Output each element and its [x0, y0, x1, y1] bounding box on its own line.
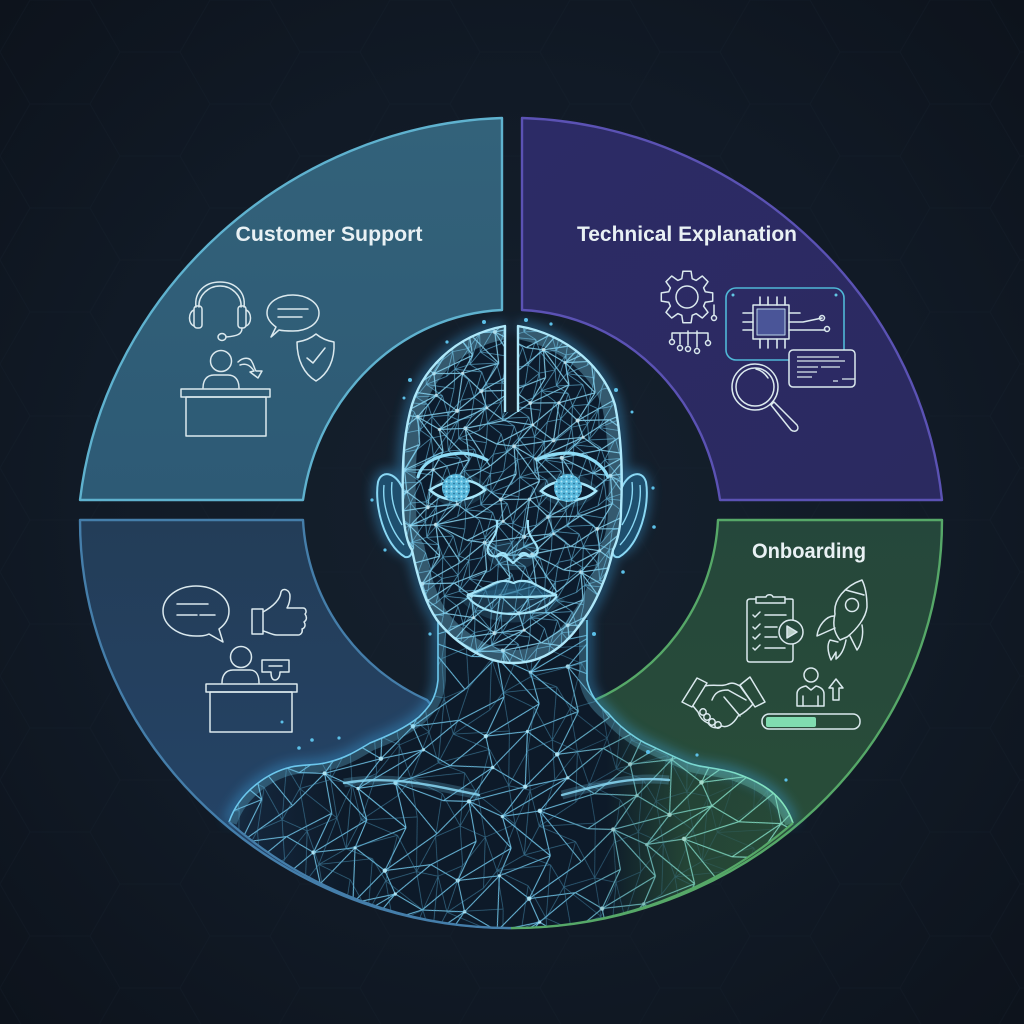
icon: magnifying glass: [732, 364, 798, 431]
icon: thumbs up: [252, 589, 306, 635]
progress bar: [762, 714, 860, 729]
icon: speech bubble: [163, 586, 229, 642]
icon: person with up arrow: [797, 668, 843, 706]
icon: agent at desk: [181, 350, 270, 436]
icon: rocket: [817, 580, 867, 660]
brows: [418, 453, 608, 477]
left eye: [430, 474, 485, 502]
panel: engagement (lower left): [80, 520, 511, 928]
heading: Technical Explanation: Technical Explanation: [577, 223, 797, 246]
icon: circuit board with chip: [726, 288, 844, 360]
icon: headset: [190, 282, 250, 340]
icon: gear with circuit: [661, 271, 716, 354]
heading: Customer Support: Customer Support: [236, 223, 422, 246]
icon: shield with check: [297, 334, 334, 381]
icon: checklist with play button: [747, 595, 803, 662]
panel: Customer Support: [80, 118, 502, 500]
lips: [467, 581, 557, 614]
icon: code document card: [789, 350, 855, 387]
right ear: [613, 474, 647, 557]
head: [395, 320, 630, 670]
floating particles: [280, 318, 788, 782]
panel: Onboarding: [511, 520, 942, 928]
icon: agent at desk with message: [206, 646, 297, 732]
infographic: circular diagram around a neural mesh head: [78, 88, 944, 936]
icon: handshake: [682, 677, 765, 728]
icon: speech bubble: [267, 295, 319, 337]
panel: Technical Explanation: [522, 118, 942, 500]
neural mesh figure: [220, 318, 810, 940]
body and shoulders: [228, 616, 794, 930]
left ear: [377, 474, 412, 557]
figure glow: [229, 326, 793, 823]
nose: [488, 520, 538, 563]
heading: Onboarding: Onboarding: [752, 540, 866, 563]
right eye: [541, 474, 596, 502]
